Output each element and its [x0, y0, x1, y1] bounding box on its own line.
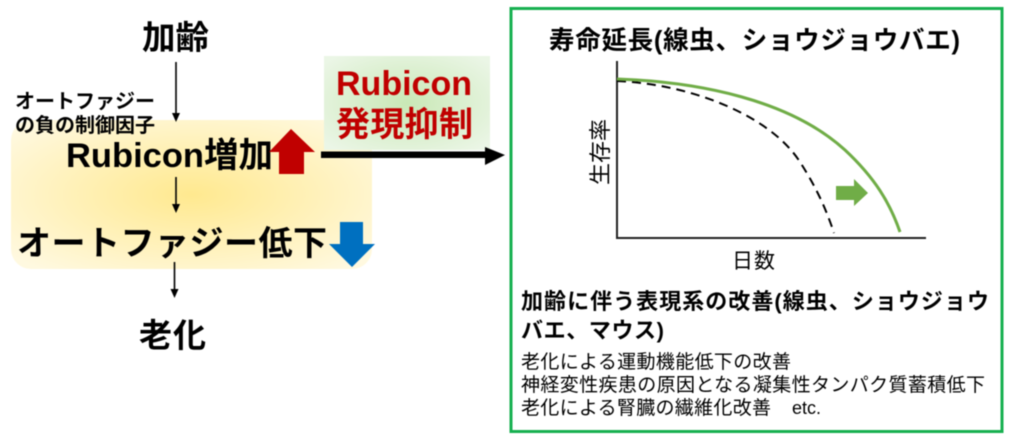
arrow: thick arrow to results panel [321, 147, 505, 165]
text: negative regulator of autophagy [15, 91, 155, 137]
x-axis label: 日数 [732, 250, 775, 273]
text: list of improvements: 老化による腎臓の繊維化改善 [521, 397, 771, 419]
curve: extended lifespan [617, 79, 900, 232]
text: Rubicon expression suppression [336, 65, 473, 144]
text: list of improvements [521, 351, 985, 419]
text: list of improvements: etc. [792, 398, 821, 418]
curve: control dashed [617, 81, 834, 233]
arrow: Rubicon to autophagy [172, 177, 180, 213]
panel: results [511, 8, 1002, 432]
text: negative regulator of autophagy: の負の制御因子 [15, 114, 155, 137]
chart axes [617, 61, 926, 238]
heading: aging phenotype improvement [521, 289, 989, 343]
text: Rubicon expression suppression: Rubicon [336, 65, 472, 103]
panel: green Rubicon suppression background [324, 56, 490, 150]
text: list of improvements: 神経変性疾患の原因となる凝集性タンパク質蓄積低下 [521, 374, 985, 396]
panel: yellow autophagy background [11, 120, 372, 269]
arrow: aging to Rubicon [172, 62, 180, 122]
text: list of improvements: 老化による運動機能低下の改善 [521, 351, 791, 373]
heading: aging phenotype improvement: バエ、マウス) [521, 318, 664, 343]
heading: senescence: 老化 [139, 317, 206, 354]
heading: autophagy decrease: オートファジー低下 [17, 225, 327, 263]
heading: aging: 加齢 [142, 19, 209, 56]
heading: aging phenotype improvement: 加齢に伴う表現系の改善(線虫、ショウジョウ [521, 289, 989, 314]
heading: lifespan extension: 寿命延長(線虫、ショウジョウバエ) [549, 27, 960, 55]
text: negative regulator of autophagy: オートファジー [15, 91, 155, 113]
text: Rubicon expression suppression: 発現抑制 [336, 106, 473, 144]
heading: Rubicon increase: Rubicon増加 [66, 137, 273, 175]
chart: survival curve [588, 61, 926, 273]
y-axis label: 生存率 [588, 119, 613, 185]
arrow: autophagy to aging [170, 262, 178, 298]
icon: red up arrow [269, 129, 315, 174]
icon: blue down arrow [329, 222, 375, 267]
icon: green shift arrow [836, 179, 868, 206]
